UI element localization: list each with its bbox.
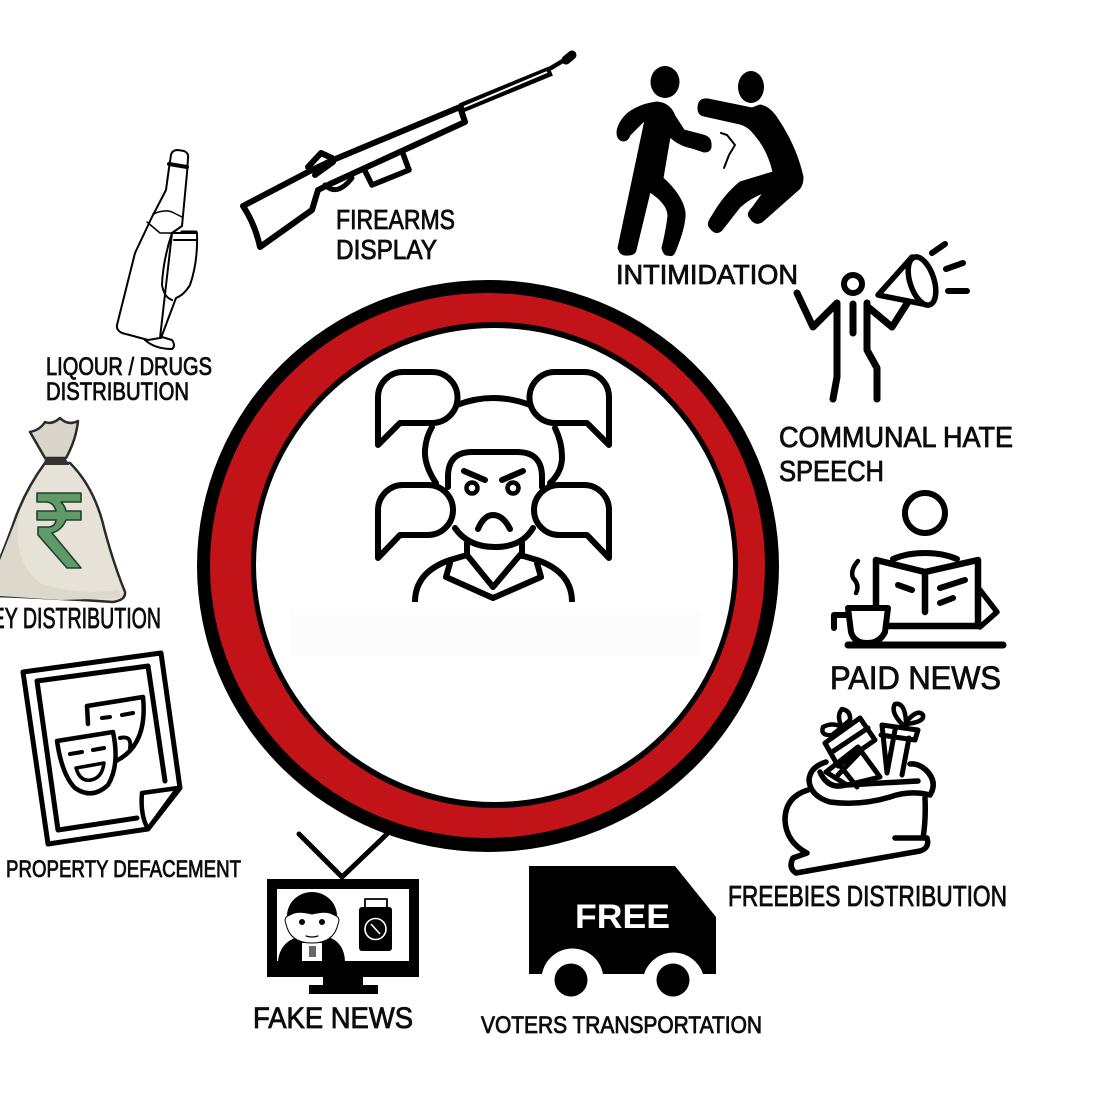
central red ring bbox=[197, 280, 779, 852]
label: firearms display: FIREARMS bbox=[336, 204, 455, 235]
label: property defacement: PROPERTY DEFACEMENT bbox=[6, 856, 241, 883]
label: firearms display: DISPLAY bbox=[336, 234, 437, 265]
label: freebies distribution: FREEBIES DISTRIBUTION bbox=[728, 881, 1007, 913]
label: liquor drugs distribution: DISTRIBUTION bbox=[46, 378, 189, 406]
icon: person reading paid news bbox=[834, 493, 1003, 645]
icon: intimidation fighters bbox=[617, 66, 803, 256]
label: fake news: FAKE NEWS bbox=[253, 1002, 413, 1035]
label: communal hate speech bbox=[779, 422, 1013, 488]
label: communal hate speech: SPEECH bbox=[779, 456, 884, 488]
icon: black van with free sign bbox=[529, 866, 716, 996]
icon: television fake news bbox=[267, 834, 419, 994]
icon: defaced poster with theatre masks bbox=[23, 653, 180, 844]
icon: angry person with speech bubbles bbox=[378, 372, 609, 602]
icon: rifle bbox=[243, 55, 572, 247]
label: paid news: PAID NEWS bbox=[830, 660, 1001, 696]
label: liquor drugs distribution: LIQOUR / DRUGS bbox=[46, 353, 212, 381]
icon: rupee money bag bbox=[0, 418, 125, 602]
icon: gift sack freebies bbox=[785, 704, 933, 873]
label: voters transportation: VOTERS TRANSPORTATION bbox=[481, 1012, 762, 1039]
label: liquor drugs distribution bbox=[46, 353, 212, 406]
icon: black van with free sign: FREE bbox=[575, 898, 670, 936]
label: communal hate speech: COMMUNAL HATE bbox=[779, 422, 1013, 454]
label: firearms display bbox=[336, 204, 455, 265]
label: intimidation: INTIMIDATION bbox=[616, 259, 798, 290]
icon: bottle and glass bbox=[117, 150, 197, 349]
icon: person with megaphone bbox=[797, 244, 967, 399]
